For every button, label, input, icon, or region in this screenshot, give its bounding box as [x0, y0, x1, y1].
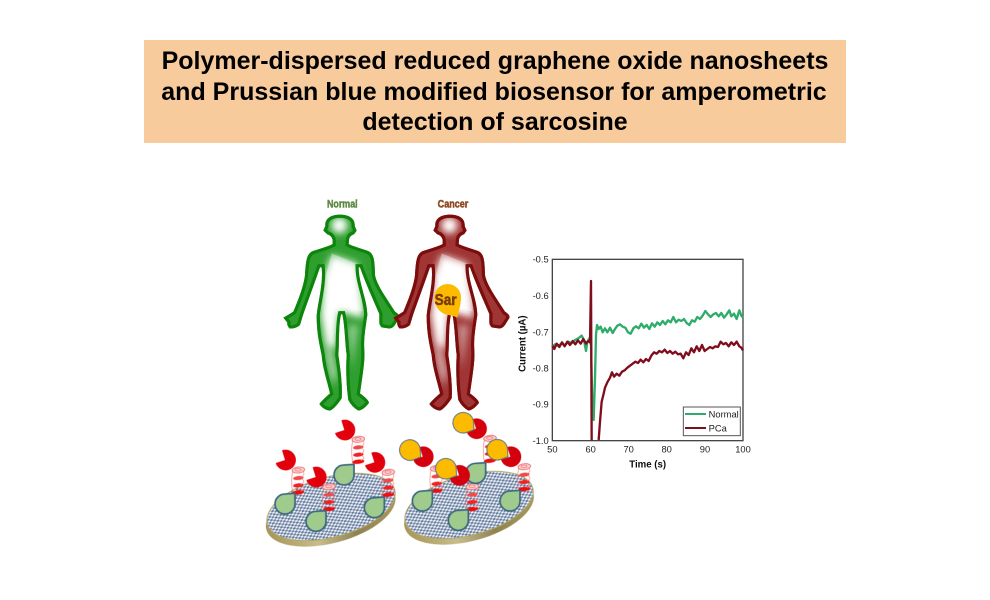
- title banner: Polymer-dispersed reduced graphene oxide nanosheets: [162, 47, 828, 75]
- y axis ticks: -0.6: [533, 291, 549, 301]
- x axis ticks: 80: [661, 445, 672, 455]
- title banner: and Prussian blue modified biosensor for amperometric: [161, 78, 827, 106]
- line chart: current vs time: [518, 255, 751, 471]
- series: Normal: [552, 310, 743, 420]
- panel: human figures: [283, 198, 510, 411]
- red enzymes: [276, 420, 385, 487]
- legend: Normal: [709, 410, 739, 420]
- y axis ticks: -0.7: [533, 327, 549, 337]
- x axis ticks: 100: [735, 445, 751, 455]
- panel: biosensor electrodes: [258, 412, 541, 559]
- sarcosine molecules: [400, 412, 508, 479]
- red enzymes with target: [413, 418, 521, 486]
- x axis ticks: 70: [623, 445, 634, 455]
- x axis ticks: [547, 445, 751, 455]
- line chart: current vs time: Current (µA): [518, 315, 529, 372]
- x axis ticks: 90: [700, 445, 710, 455]
- label: Cancer: Cancer: [438, 198, 469, 210]
- figure: normal body: [283, 215, 400, 411]
- marker: sarcosine: [434, 284, 461, 318]
- electrode: cancer: [397, 412, 541, 557]
- aptamer springs: [292, 436, 395, 512]
- marker: sarcosine: Sar: [435, 292, 457, 309]
- green nanoparticles with target: [412, 463, 520, 530]
- label: Normal: Normal: [327, 198, 358, 210]
- x axis ticks: 60: [585, 445, 596, 455]
- series: PCa: [552, 281, 592, 440]
- y axis ticks: [533, 255, 549, 446]
- title banner: detection of sarcosine: [362, 108, 628, 136]
- title banner: [144, 40, 846, 143]
- plot frame: [552, 259, 743, 441]
- axis titles: Time (s): [629, 460, 666, 471]
- y axis ticks: -0.8: [533, 363, 549, 373]
- legend: PCa: [709, 424, 728, 434]
- y axis ticks: -0.9: [533, 400, 549, 410]
- x axis ticks: 50: [547, 445, 558, 455]
- electrode: normal: [258, 420, 403, 559]
- y axis ticks: -1.0: [533, 436, 549, 446]
- figure: cancer body: [393, 215, 510, 411]
- y axis ticks: -0.5: [533, 255, 549, 265]
- labels and sarcosine marker: [327, 198, 469, 318]
- aptamer springs with target: [430, 435, 531, 512]
- green nanoparticles: [275, 464, 384, 531]
- legend: [683, 407, 740, 436]
